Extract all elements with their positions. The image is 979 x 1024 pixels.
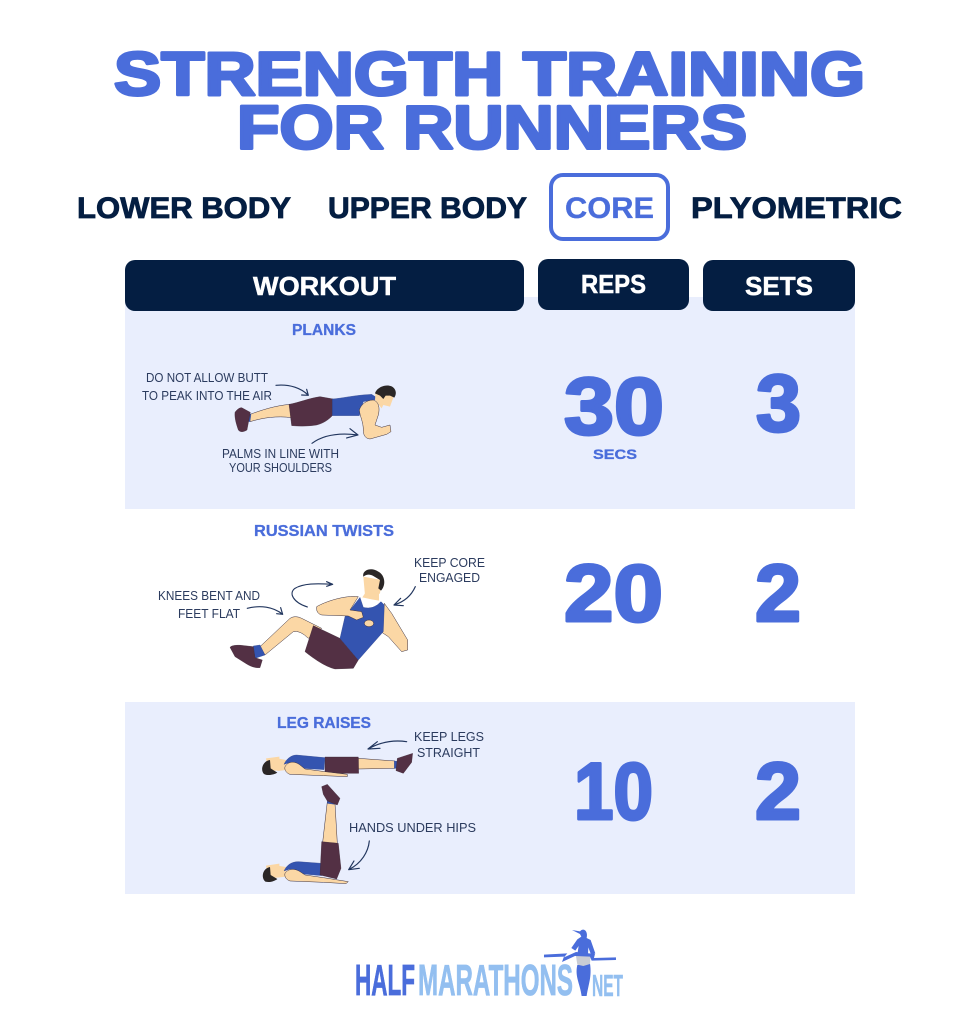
icon: plank figure	[235, 385, 396, 439]
heading: planks: PLANKS	[292, 322, 356, 339]
label: palms note: PALMS IN LINE WITH	[222, 446, 339, 461]
arrow: hands note	[349, 841, 369, 870]
arrow: core note	[394, 587, 415, 606]
logo: halfmarathons.net	[355, 930, 623, 1005]
table header: sets: SETS	[745, 271, 813, 301]
label: butt note: DO NOT ALLOW BUTT	[146, 370, 268, 385]
panel: leg raises row background	[125, 702, 855, 894]
sets: 2: 2	[755, 747, 801, 837]
logo: halfmarathons.net: HALF	[355, 956, 415, 1005]
sets: 2: 2	[755, 549, 801, 639]
arrow: knees note	[247, 607, 283, 614]
arrow: palms note	[312, 429, 358, 443]
label: knees bent	[158, 588, 260, 621]
title	[114, 40, 865, 162]
icon: leg raise figure, legs down	[262, 753, 413, 777]
table header: sets	[703, 260, 855, 311]
label: keep core engaged: ENGAGED	[419, 570, 480, 585]
label: palms note	[222, 446, 339, 475]
panel: planks row background	[125, 297, 855, 509]
label: butt note	[142, 370, 272, 403]
table header: workout: WORKOUT	[253, 271, 396, 301]
tab: lower body: LOWER BODY	[77, 192, 291, 225]
title: FOR RUNNERS	[237, 94, 747, 162]
logo: halfmarathons.net: NET	[592, 968, 623, 1003]
label: butt note: TO PEAK INTO THE AIR	[142, 388, 272, 403]
label: keep core engaged	[414, 555, 485, 585]
icon: russian twist figure	[230, 569, 408, 669]
table header: reps: REPS	[581, 269, 646, 299]
icon: runner	[544, 930, 616, 996]
arrow: rotation	[292, 582, 333, 607]
heading: russian twists: RUSSIAN TWISTS	[254, 523, 394, 540]
icon: leg raise figure, legs up	[263, 784, 348, 884]
label: hands under hips: HANDS UNDER HIPS	[349, 820, 476, 835]
reps: 10: 10	[574, 747, 653, 837]
tab: plyometric: PLYOMETRIC	[691, 192, 902, 225]
label: keep core engaged: KEEP CORE	[414, 555, 485, 570]
table header: reps	[538, 259, 689, 310]
label: palms note: YOUR SHOULDERS	[229, 460, 332, 475]
tab: core selected: CORE	[565, 192, 654, 225]
heading: leg raises: LEG RAISES	[277, 715, 371, 732]
label: keep legs straight: STRAIGHT	[417, 745, 480, 760]
logo: halfmarathons.net: MARATHONS	[418, 956, 573, 1005]
arrow: butt note	[276, 385, 308, 395]
label: knees bent: FEET FLAT	[178, 606, 240, 621]
reps: 30 secs: SECS	[593, 446, 637, 462]
label: knees bent: KNEES BENT AND	[158, 588, 260, 603]
tab: core selected	[551, 175, 668, 239]
label: keep legs straight	[414, 729, 484, 760]
table header: workout	[125, 260, 524, 311]
reps: 30 secs: 30	[564, 362, 664, 452]
title: STRENGTH TRAINING	[114, 40, 865, 108]
reps: 20: 20	[564, 549, 663, 639]
category tabs	[77, 175, 902, 239]
arrow: keep legs note	[368, 741, 407, 749]
sets: 3: 3	[756, 359, 801, 449]
tab: upper body: UPPER BODY	[328, 192, 527, 225]
label: keep legs straight: KEEP LEGS	[414, 729, 484, 744]
